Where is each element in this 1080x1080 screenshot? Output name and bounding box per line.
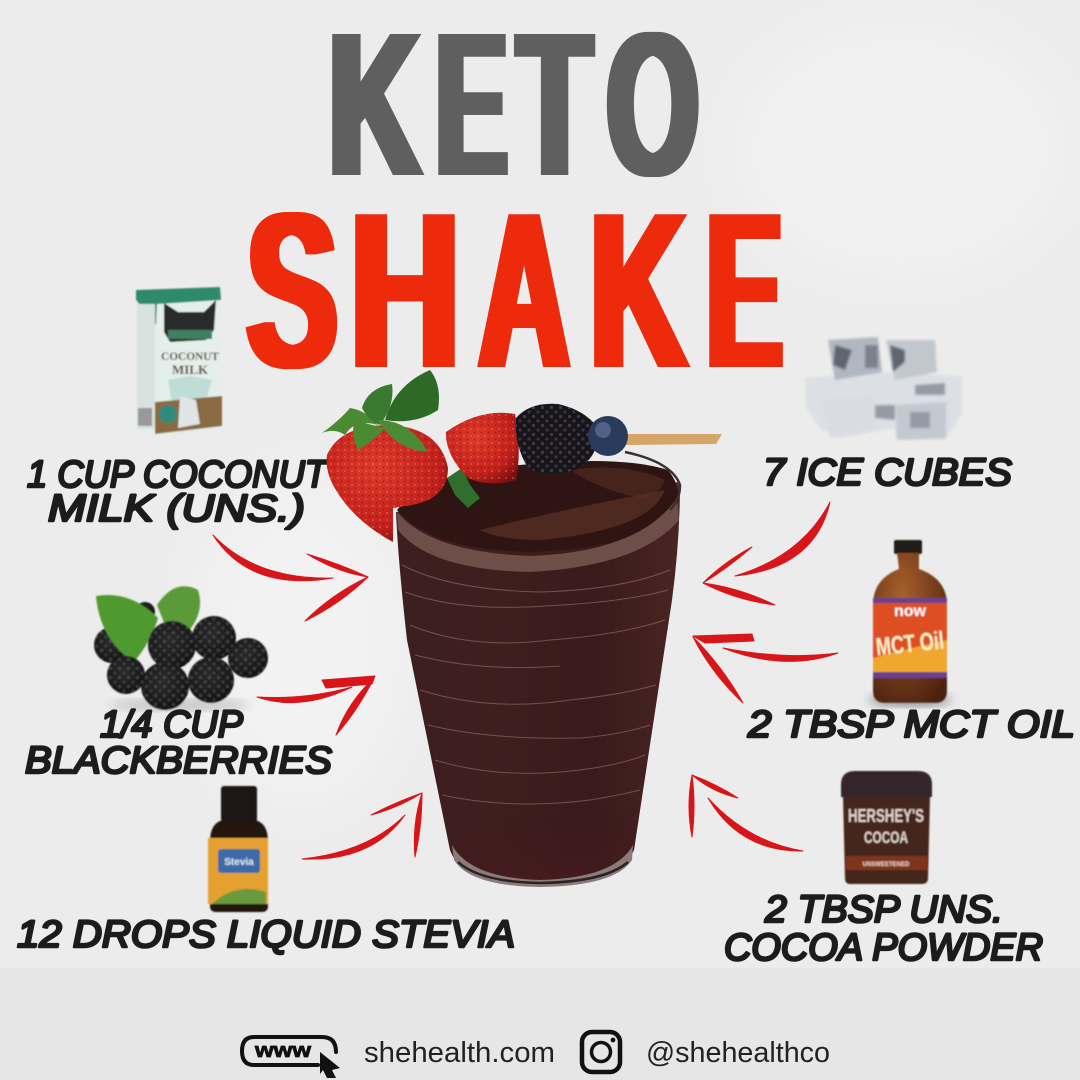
icon: coconut milk carton: MILK bbox=[172, 362, 209, 377]
icon: instagram bbox=[582, 1032, 620, 1072]
label: blackberries: 1/4 CUP bbox=[100, 704, 244, 746]
icon: www cursor: www bbox=[254, 1040, 312, 1062]
glass base bbox=[452, 845, 633, 887]
label: cocoa powder bbox=[724, 889, 1043, 969]
title: SHAKE: K bbox=[590, 167, 687, 415]
arrow: coconut milk to glass bbox=[213, 535, 368, 621]
whole strawberry bbox=[327, 425, 448, 542]
label: coconut milk: MILK (UNS.) bbox=[48, 488, 305, 530]
label: blackberries: BLACKBERRIES bbox=[25, 740, 332, 782]
icon: cocoa tin bbox=[841, 771, 932, 884]
garnish: strawberries, blackberry and blueberry on skewer bbox=[322, 370, 722, 542]
label: coconut milk bbox=[27, 454, 330, 530]
label: blackberries bbox=[25, 704, 332, 782]
raspberry half strawberry bbox=[446, 413, 519, 484]
label: cocoa powder: 2 TBSP UNS. bbox=[764, 889, 1003, 931]
glass ridges bbox=[402, 565, 670, 804]
icon: liquid stevia bottle: Stevia bbox=[224, 857, 254, 868]
footer: instagram bbox=[582, 1032, 830, 1072]
icon: www cursor bbox=[242, 1037, 340, 1078]
icon: blackberries bbox=[94, 586, 268, 711]
footer: website: shehealth.com bbox=[364, 1037, 555, 1069]
label: MCT oil: 2 TBSP MCT OIL bbox=[747, 704, 1075, 746]
strawberry leaves bbox=[322, 370, 439, 452]
icon: coconut milk carton: COCONUT bbox=[161, 349, 219, 363]
label: stevia: 12 DROPS LIQUID STEVIA bbox=[17, 914, 515, 956]
arrow: blackberries to glass bbox=[257, 676, 375, 735]
title: SHAKE: H bbox=[350, 167, 460, 415]
smoothie glass bbox=[396, 452, 680, 887]
blackberry bbox=[516, 404, 598, 474]
icon: cocoa tin: COCOA bbox=[864, 828, 908, 847]
blueberry bbox=[588, 416, 628, 456]
footer: instagram: @shehealthco bbox=[646, 1037, 830, 1069]
label: ice cubes: 7 ICE CUBES bbox=[763, 452, 1012, 494]
label: coconut milk: 1 CUP COCONUT bbox=[27, 454, 330, 496]
arrow: cocoa to glass bbox=[689, 775, 803, 851]
arrow: ice cubes to glass bbox=[703, 502, 830, 605]
label: cocoa powder: COCOA POWDER bbox=[724, 927, 1043, 969]
icon: MCT oil bottle: MCT Oil bbox=[875, 627, 945, 661]
icon: cocoa tin: HERSHEY'S bbox=[848, 806, 924, 826]
rim bbox=[397, 498, 679, 572]
title: SHAKE: A bbox=[479, 167, 569, 415]
title: SHAKE: S bbox=[247, 167, 338, 415]
icon: liquid stevia bottle bbox=[208, 786, 268, 912]
leaf sprig bbox=[447, 468, 480, 508]
title: SHAKE: E bbox=[707, 167, 782, 415]
arrow: stevia to glass bbox=[302, 793, 422, 859]
icon: MCT oil bottle bbox=[868, 540, 952, 707]
drink surface bbox=[397, 461, 679, 552]
icon: ice cubes bbox=[805, 337, 962, 440]
icon: MCT oil bottle: now bbox=[894, 603, 927, 620]
skewer bbox=[625, 434, 722, 445]
icon: cocoa tin: UNSWEETENED bbox=[863, 862, 910, 868]
icon: coconut milk carton bbox=[136, 287, 222, 438]
footer: website bbox=[242, 1037, 555, 1078]
arrow: MCT oil to glass bbox=[693, 634, 838, 703]
